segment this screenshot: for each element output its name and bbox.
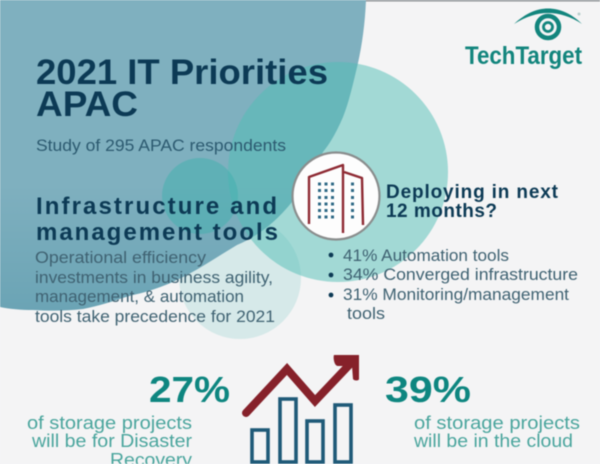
stat: 39 percent (385, 369, 580, 451)
logo: TechTarget (465, 8, 583, 70)
section heading: management tools (36, 219, 278, 246)
title (36, 53, 328, 124)
subtitle: Study of 295 APAC respondents (36, 136, 286, 155)
background shape: large blue blob (0, 0, 366, 311)
background shape: small teal circle (162, 158, 238, 234)
bullet list: tools (347, 305, 385, 323)
section heading: Infrastructure and (36, 193, 277, 220)
stat: 27 percent: will be for Disaster (31, 430, 192, 451)
bullet list: 34% Converged infrastructure (343, 266, 578, 284)
section description: management, & automation (35, 288, 244, 306)
icon: building in circle (292, 152, 380, 240)
stat: 27 percent: 27% (149, 369, 230, 410)
stat: 27 percent: of storage projects (27, 412, 192, 433)
stat: 27 percent (27, 369, 230, 464)
bullet list (329, 247, 578, 323)
section description: Operational efficiency (35, 249, 207, 267)
title: 2021 IT Priorities (36, 53, 328, 92)
section description: tools take precedence for 2021 (35, 308, 275, 326)
section heading (36, 193, 278, 246)
stat: 39 percent: 39% (385, 369, 471, 410)
title: APAC (36, 85, 138, 124)
logo: TechTarget: TechTarget (465, 42, 583, 70)
bullet list: 31% Monitoring/management (343, 286, 569, 304)
background shape: pale circle (179, 217, 301, 339)
section description: investments in business agility, (35, 269, 273, 287)
stat: 39 percent: will be in the cloud (413, 430, 573, 451)
deploying heading (386, 182, 559, 222)
background shape: large teal circle (228, 62, 448, 282)
deploying heading: 12 months? (386, 201, 497, 222)
deploying heading: Deploying in next (386, 182, 559, 203)
stat: 39 percent: of storage projects (414, 412, 580, 433)
bullet list: 41% Automation tools (343, 247, 509, 265)
section description (35, 249, 275, 326)
icon: bar chart with rising arrow (246, 355, 359, 462)
